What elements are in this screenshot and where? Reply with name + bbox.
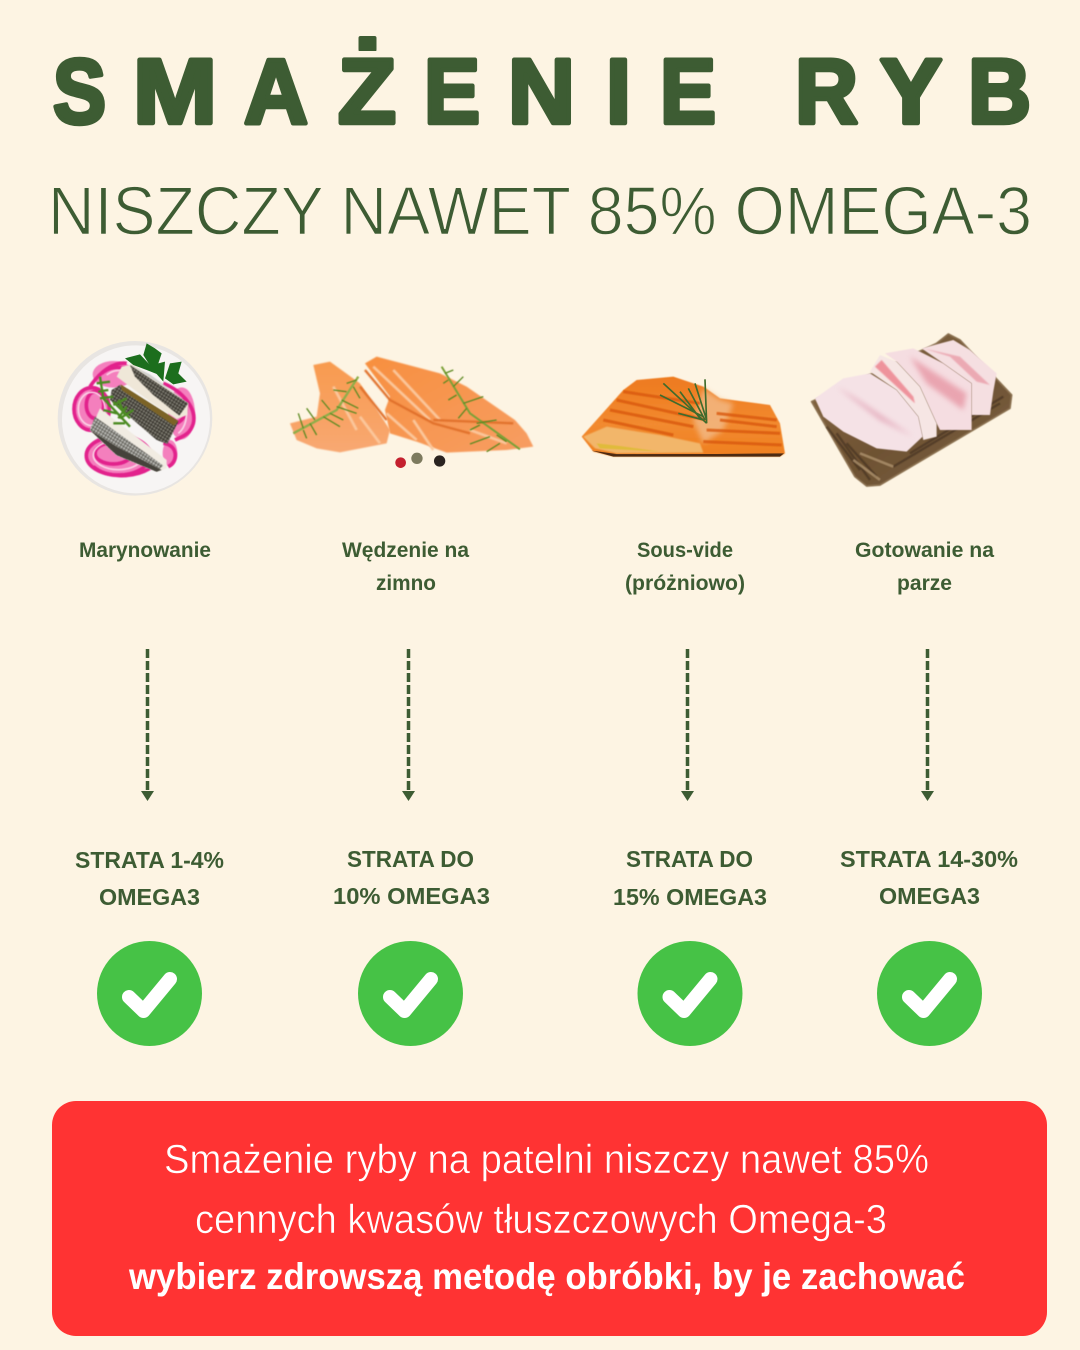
- arrow 2: [402, 649, 415, 801]
- label: Gotowanie na parze: parze: [897, 572, 952, 595]
- arrow 1: [141, 649, 154, 801]
- icon: smoked salmon slices: [290, 357, 533, 468]
- result: strata do 10%: [333, 846, 490, 909]
- subtitle: NISZCZY NAWET 85% OMEGA-3: [48, 172, 1032, 250]
- result: strata do 15%: 15% OMEGA3: [613, 884, 767, 910]
- result: strata do 15%: STRATA DO: [626, 846, 753, 872]
- arrow 4: [921, 649, 934, 801]
- result: strata 1-4%: [75, 847, 224, 910]
- label: Sous-vide (próżniowo): Sous-vide: [637, 539, 733, 562]
- callout text: Smażenie ryby na patelni niszczy nawet 85%: [164, 1136, 929, 1182]
- title: R: [795, 41, 858, 143]
- title: Ż: [338, 41, 396, 143]
- label: Wędzenie na zimno: zimno: [376, 572, 436, 595]
- title: [53, 36, 1031, 143]
- label: Gotowanie na parze: Gotowanie na: [855, 539, 994, 562]
- icon: check 2: [358, 941, 463, 1046]
- title: E: [424, 41, 480, 143]
- result: strata do 10%: 10% OMEGA3: [333, 883, 490, 909]
- label: Marynowanie: Marynowanie: [79, 539, 211, 562]
- title: I: [606, 41, 631, 143]
- callout text: [128, 1136, 965, 1297]
- icon: check 4: [877, 941, 982, 1046]
- label: Gotowanie na parze: [855, 539, 994, 595]
- result: strata 1-4%: OMEGA3: [99, 884, 200, 910]
- title: S: [53, 41, 106, 143]
- result: strata 14-30%: STRATA 14-30%: [840, 846, 1018, 872]
- column 3: sous-vide: [582, 377, 785, 1046]
- title: A: [244, 41, 308, 143]
- result: strata 14-30%: OMEGA3: [879, 883, 980, 909]
- callout text: wybierz zdrowszą metodę obróbki, by je zachować: [128, 1256, 965, 1297]
- result: strata 1-4%: STRATA 1-4%: [75, 847, 224, 873]
- title: N: [508, 41, 575, 143]
- title: E: [660, 41, 716, 143]
- result: strata do 10%: STRATA DO: [347, 846, 474, 872]
- title: B: [968, 41, 1031, 143]
- column 4: steaming: [812, 334, 1018, 1046]
- result: strata 14-30%: [840, 846, 1018, 909]
- column 2: smoked salmon: [290, 357, 533, 1046]
- arrow 3: [681, 649, 694, 801]
- icon: check 3: [638, 941, 742, 1046]
- label: Sous-vide (próżniowo): (próżniowo): [625, 572, 745, 595]
- icon: plate with marinated herring: [58, 341, 212, 496]
- label: Wędzenie na zimno: [342, 539, 469, 595]
- title: Y: [880, 41, 942, 143]
- title: M: [133, 41, 217, 143]
- icon: check 1: [97, 941, 202, 1046]
- callout text: cennych kwasów tłuszczowych Omega-3: [195, 1196, 887, 1242]
- column 1: marinated fish: [58, 341, 224, 1046]
- icon: white fish fillets on wooden board: [812, 334, 1012, 486]
- icon: grilled salmon with rosemary: [582, 377, 785, 457]
- label: Wędzenie na zimno: Wędzenie na: [342, 539, 469, 562]
- result: strata do 15%: [613, 846, 767, 910]
- callout panel: [52, 1101, 1047, 1336]
- label: Sous-vide (próżniowo): [625, 539, 745, 595]
